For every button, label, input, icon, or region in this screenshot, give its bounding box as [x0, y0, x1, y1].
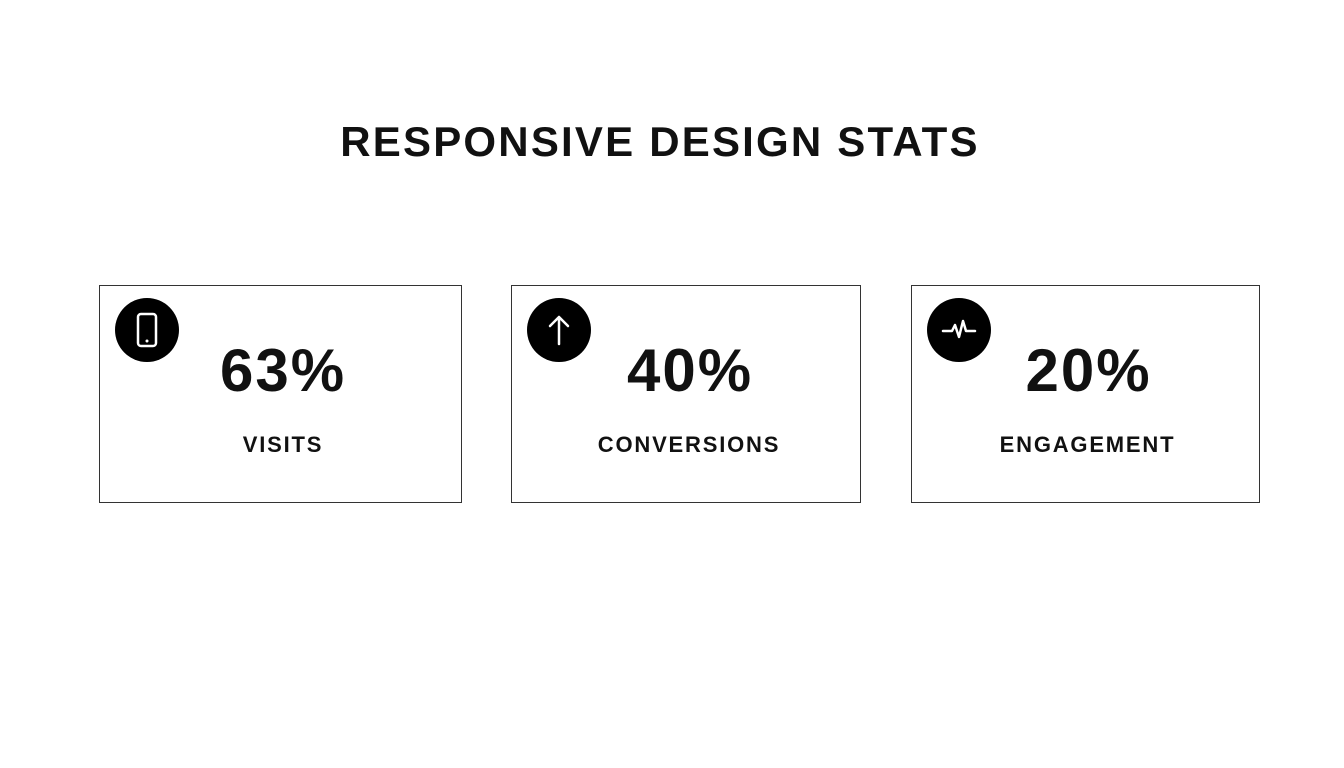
label: conversions: CONVERSIONS: [598, 432, 780, 457]
panel: conversions: [511, 285, 861, 503]
card border: [911, 285, 1260, 503]
icon: up arrow: [527, 298, 591, 362]
icon: phone: [115, 298, 179, 362]
card border: [99, 285, 462, 503]
panel: visits: [99, 285, 462, 503]
card border: [511, 285, 861, 503]
title: RESPONSIVE DESIGN STATS: [340, 118, 980, 165]
number: 63%: 63%: [220, 337, 346, 404]
label: engagement: ENGAGEMENT: [1000, 432, 1175, 457]
number: 40%: 40%: [627, 337, 753, 404]
number: 20%: 20%: [1025, 337, 1152, 404]
icon: pulse: [927, 298, 991, 362]
label: visits: VISITS: [243, 432, 323, 457]
panel: engagement: [911, 285, 1260, 503]
